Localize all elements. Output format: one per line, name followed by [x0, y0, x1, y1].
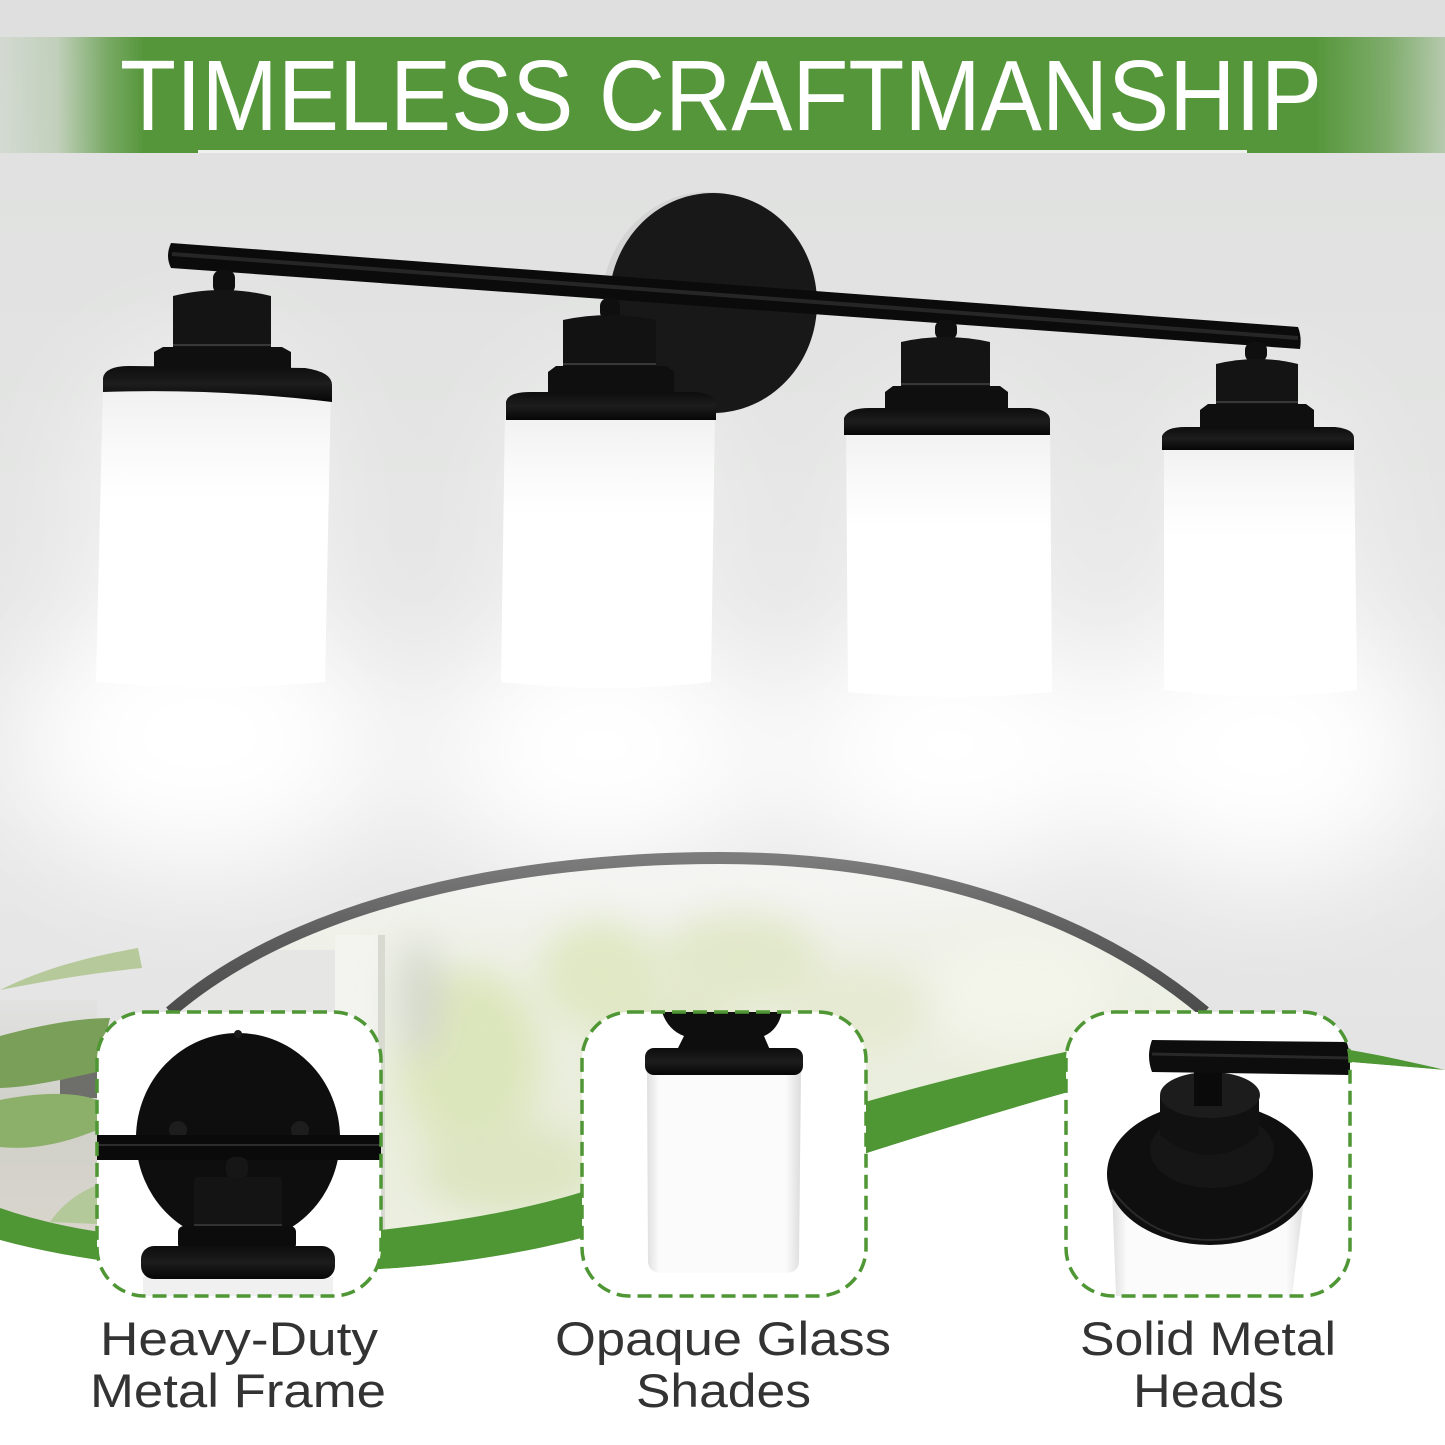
inset: heavy-duty metal frame: [97, 1012, 381, 1297]
label: solid metal heads: Heads: [1133, 1364, 1284, 1417]
label: heavy-duty metal frame: [90, 1312, 386, 1417]
dashed outline: [97, 1012, 381, 1296]
metal head: [103, 270, 332, 402]
lamp 2: [501, 298, 716, 688]
wall backplate: [602, 192, 817, 414]
mirror: [166, 852, 1209, 1230]
mirror frame: [170, 858, 1205, 1012]
lamp bar: [168, 243, 1301, 349]
label: heavy-duty metal frame: Metal Frame: [90, 1364, 386, 1417]
label: opaque glass shades: Shades: [636, 1364, 811, 1417]
lamp 4: [1162, 342, 1357, 696]
title: TIMELESS CRAFTMANSHIP: [120, 40, 1322, 152]
label: opaque glass shades: [555, 1312, 891, 1417]
inset: opaque glass shades: [582, 1012, 866, 1296]
green wave ribbon: [0, 1037, 1445, 1272]
lamp 1: [96, 270, 332, 687]
dashed outline: [1066, 1012, 1350, 1296]
inset: solid metal heads: [1066, 1012, 1350, 1296]
white lower page area: [0, 1061, 1445, 1445]
label: solid metal heads: Solid Metal: [1080, 1312, 1336, 1365]
plant leaves: [0, 948, 142, 1240]
inset photo: metal head from below: [1107, 1040, 1350, 1296]
mirror reflection: [278, 865, 1195, 1230]
inset photo: glass shade: [645, 1012, 803, 1273]
dashed outline: [582, 1012, 866, 1296]
inset photo: backplate and arm: [97, 1030, 381, 1297]
top banner: [0, 37, 1445, 153]
label: heavy-duty metal frame: Heavy-Duty: [100, 1312, 379, 1365]
label: solid metal heads: [1080, 1312, 1336, 1417]
label: opaque glass shades: Opaque Glass: [555, 1312, 891, 1365]
glass shade: [96, 385, 331, 687]
lamp 3: [844, 320, 1052, 697]
